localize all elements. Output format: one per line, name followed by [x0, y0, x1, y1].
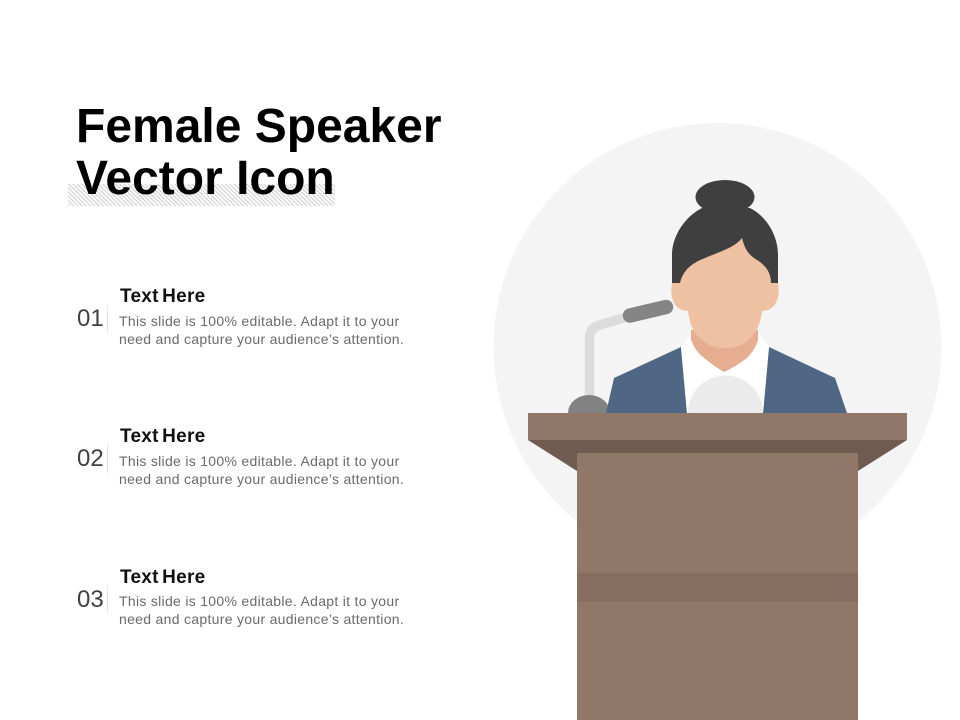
item 01 [77, 286, 404, 347]
title: Vector Icon [76, 152, 335, 205]
description 03 [119, 593, 404, 627]
icon: microphone [568, 307, 666, 413]
title underline hatch [68, 184, 335, 206]
description 02: This slide is 100% editable. Adapt it to your [119, 453, 399, 469]
speaker figure [606, 180, 847, 413]
description 01: need and capture your audience’s attention. [119, 331, 404, 347]
item 03 [77, 567, 404, 627]
title: Female Speaker [76, 100, 442, 153]
description 02 [119, 453, 404, 487]
title [76, 100, 442, 205]
background circle [494, 123, 942, 571]
description 01 [119, 313, 404, 347]
description 02: need and capture your audience’s attention. [119, 471, 404, 487]
heading 02: Text Here [120, 426, 205, 447]
description 01: This slide is 100% editable. Adapt it to your [119, 313, 399, 329]
item 02 [77, 426, 404, 487]
number 03: 03 [77, 586, 104, 613]
heading 01: Text Here [120, 286, 205, 307]
description 03: need and capture your audience’s attention. [119, 611, 404, 627]
number 02: 02 [77, 445, 104, 472]
description 03: This slide is 100% editable. Adapt it to your [119, 593, 399, 609]
number 01: 01 [77, 305, 104, 332]
podium [528, 413, 907, 720]
heading 03: Text Here [120, 567, 205, 588]
